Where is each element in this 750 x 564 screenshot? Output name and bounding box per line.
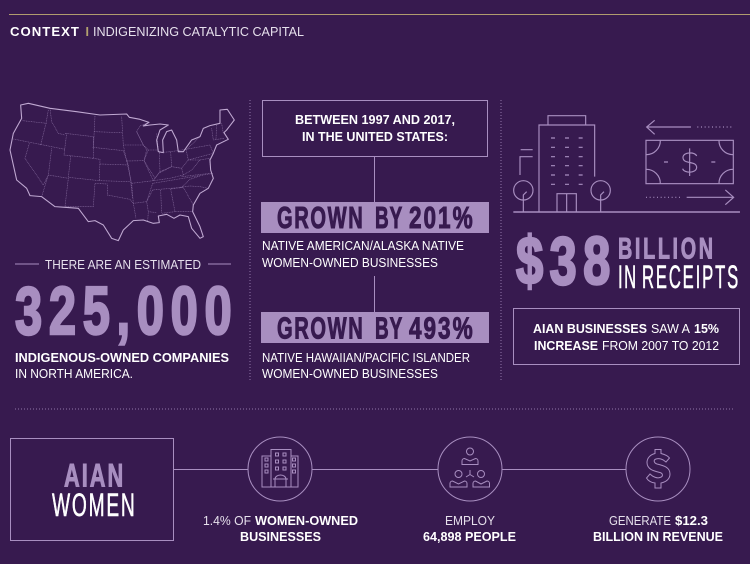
- title: I: [86, 25, 89, 39]
- banner: grown by 493%: GROWN: [277, 313, 363, 346]
- callout: between 1997 and 2017: BETWEEN 1997 AND 2017,: [295, 113, 455, 127]
- text: women-owned businesses share: 1.4% OF: [203, 514, 251, 528]
- banner: grown by 493%: BY: [375, 312, 402, 346]
- text: generate revenue: BILLION IN REVENUE: [593, 530, 723, 544]
- text: native american women-owned businesses: NATIVE AMERICAN/ALASKA NATIVE: [262, 239, 464, 253]
- heading box: AIAN women: WOMEN: [52, 487, 135, 523]
- banner: grown by 493%: 493%: [409, 311, 473, 345]
- text: billion in receipts: [618, 233, 738, 296]
- icon: building, trees and money exchange: [513, 116, 740, 212]
- title: CONTEXT: [10, 24, 80, 39]
- text: generate revenue: GENERATE: [609, 514, 671, 528]
- text: employ people: EMPLOY: [445, 514, 496, 528]
- text: indigenous-owned companies: INDIGENOUS-OWNED COMPANIES: [15, 351, 229, 365]
- callout: AIAN businesses increase: SAW A: [651, 322, 691, 336]
- banner: grown by 201%: [261, 201, 489, 235]
- text: native hawaiian women-owned businesses: [262, 351, 470, 381]
- text: women-owned businesses share: BUSINESSES: [240, 530, 321, 544]
- text: generate revenue: $12.3: [675, 514, 708, 528]
- callout: between 1997 and 2017: IN THE UNITED STATES:: [302, 130, 448, 144]
- text: indigenous-owned companies: [15, 351, 229, 381]
- heading box: AIAN women: AIAN: [64, 457, 123, 494]
- text: employ people: [423, 514, 516, 544]
- big number: 325,000: 325,000: [15, 272, 232, 349]
- callout: AIAN businesses increase: FROM 2007 TO 2012: [602, 339, 719, 353]
- text: indigenous-owned companies: IN NORTH AMERICA.: [15, 367, 133, 381]
- text: women-owned businesses share: WOMEN-OWNED: [255, 514, 358, 528]
- icon: dollar sign: [626, 437, 690, 501]
- text: billion in receipts: RECEIPTS: [642, 260, 738, 296]
- text: generate revenue: [593, 514, 723, 544]
- panel: receipts: [513, 116, 740, 364]
- callout: between 1997 and 2017: [262, 100, 488, 156]
- text: native hawaiian women-owned businesses: WOMEN-OWNED BUSINESSES: [262, 367, 438, 381]
- banner: grown by 201%: BY: [375, 202, 402, 235]
- big number: $38: $38: [516, 222, 610, 299]
- icon: office building: [248, 437, 312, 501]
- text: employ people: 64,898 PEOPLE: [423, 530, 516, 544]
- icon: people network: [438, 437, 502, 501]
- panel: AIAN women: [10, 437, 723, 544]
- title: INDIGENIZING CATALYTIC CAPITAL: [93, 24, 304, 39]
- banner: grown by 201%: 201%: [409, 201, 473, 235]
- callout: AIAN businesses increase: INCREASE: [534, 339, 598, 353]
- text: native american women-owned businesses: WOMEN-OWNED BUSINESSES: [262, 256, 438, 270]
- text: billion in receipts: IN: [618, 260, 636, 296]
- text: billion in receipts: BILLION: [618, 233, 713, 266]
- panel: growth statistics: [261, 100, 489, 381]
- banner: grown by 201%: GROWN: [277, 202, 363, 235]
- text: there are an estimated: THERE ARE AN ESTIMATED: [45, 258, 201, 272]
- panel: map and company count: [10, 103, 234, 381]
- banner: grown by 493%: [261, 311, 489, 346]
- text: native hawaiian women-owned businesses: NATIVE HAWAIIAN/PACIFIC ISLANDER: [262, 351, 470, 365]
- callout: AIAN businesses increase: 15%: [694, 322, 719, 336]
- text: women-owned businesses share: [203, 514, 358, 544]
- callout: AIAN businesses increase: AIAN BUSINESSES: [533, 322, 647, 336]
- heading box: AIAN women: [10, 438, 174, 540]
- text: native american women-owned businesses: [262, 239, 464, 270]
- callout: AIAN businesses increase: [514, 308, 740, 364]
- map: United States: [10, 103, 234, 241]
